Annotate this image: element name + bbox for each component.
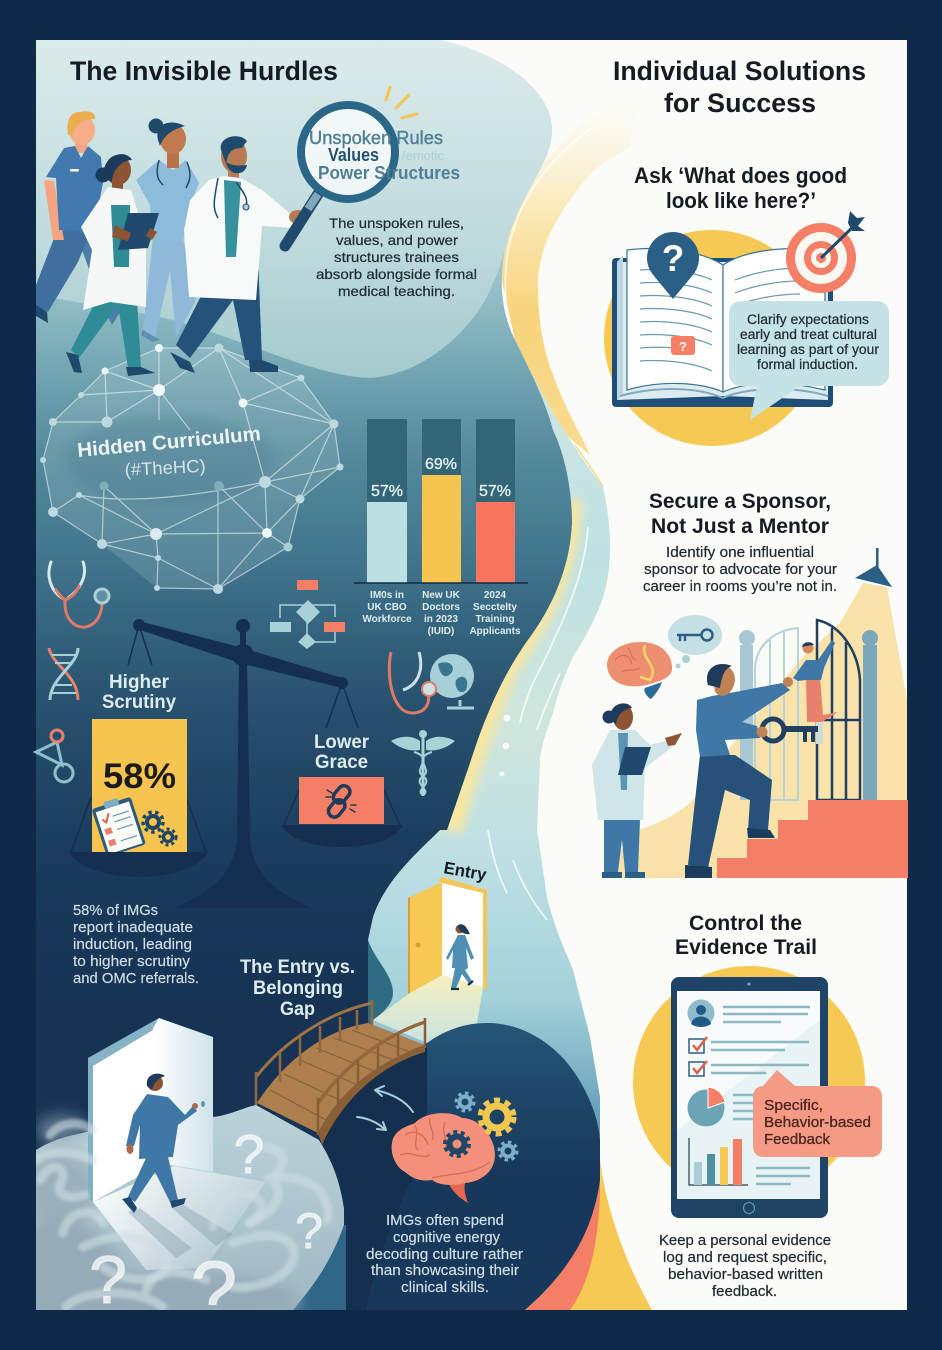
text: cognitive energy: than showcasing their: [371, 1263, 519, 1279]
band sparkles: [500, 714, 510, 776]
text: cognitive energy: [366, 1213, 523, 1296]
bar labels: (IUID): [428, 626, 454, 637]
heading: secure a sponsor: [649, 489, 831, 538]
icon: lamp: [855, 548, 892, 587]
label: hidden curriculum: (#TheHC): [124, 456, 206, 480]
label: higher scrutiny: [102, 672, 176, 713]
bar: specialty applicants: [476, 419, 515, 583]
floor under entry door: [373, 975, 483, 1043]
entry door glow shade: [368, 940, 393, 1030]
person walking to door: [122, 1074, 205, 1213]
text: evidence advice: Keep a personal evidence: [659, 1233, 831, 1249]
checklist: [689, 1037, 707, 1076]
man with key: [685, 664, 793, 878]
bar chart: IMG share: [354, 419, 528, 637]
text: sponsor advice: [643, 545, 837, 595]
doctor: white coat with clipboard: [66, 154, 159, 376]
text: hidden curriculum definition: values, and power: [336, 232, 458, 248]
text: cognitive energy: decoding culture rather: [366, 1247, 523, 1263]
callout: behavior-based feedback: Specific,: [764, 1098, 823, 1114]
icon: gears: [143, 812, 176, 845]
illustration: network brain: [40, 344, 344, 594]
text: evidence advice: feedback.: [712, 1284, 777, 1300]
fog swirls with question marks: ?: [191, 1244, 237, 1338]
heading: individual solutions: Individual Solutions: [613, 56, 866, 86]
illustration: open book: [604, 211, 865, 446]
pale wave band: [340, 370, 610, 1200]
band yellow outer edge: [575, 445, 603, 487]
magnifier words: /emotic: [402, 148, 444, 163]
shadows of legs: [128, 1204, 232, 1258]
label: hidden curriculum: Hidden Curriculum: [76, 423, 262, 462]
icon: flowchart: [270, 580, 345, 649]
icon: target with arrow: [786, 211, 865, 293]
heading: individual solutions: for Success: [664, 88, 816, 118]
label: higher scrutiny: Scrutiny: [102, 692, 176, 713]
text: cognitive energy: clinical skills.: [401, 1280, 489, 1296]
icon: small question tag: ?: [679, 339, 687, 354]
left pan with 58 percent card: [69, 719, 208, 877]
text: induction statistic: [73, 903, 199, 987]
heading: secure a sponsor: Not Just a Mentor: [651, 514, 830, 538]
icon: stethoscope and globe: [389, 652, 474, 713]
callout: behavior-based feedback: [753, 1070, 882, 1157]
panel: hurdles wave background: [36, 40, 572, 1310]
label: lower grace: Lower: [314, 732, 370, 753]
doctor: blue scrubs: [36, 111, 128, 325]
illustration: bridge: [256, 1000, 425, 1145]
floor under left door: [36, 1105, 344, 1310]
illustration: brain with gears: [357, 1086, 517, 1203]
doctor: light blue scrubs: [136, 118, 199, 342]
magnifier words: Power Structures: [318, 163, 460, 183]
label: hidden curriculum: [76, 423, 262, 480]
bar: new UK doctors: 69%: [425, 456, 457, 473]
label: lower grace: Grace: [315, 752, 368, 773]
magnifier words: [309, 128, 460, 183]
illustration: doctors walking: [36, 111, 307, 376]
doctor with clipboard: [592, 703, 682, 878]
text: evidence advice: log and request specific,: [663, 1250, 827, 1266]
text: sponsor advice: career in rooms you’re not in.: [643, 579, 837, 595]
heading: ask what does good look like: [634, 163, 847, 213]
bar: specialty applicants: 57%: [479, 483, 511, 500]
fog swirls with question marks: ?: [295, 1203, 323, 1259]
bar labels: Doctors: [422, 602, 460, 613]
text: sponsor advice: sponsor to advocate for your: [644, 562, 837, 578]
text: hidden curriculum definition: medical teaching.: [338, 283, 455, 299]
heading: secure a sponsor: Secure a Sponsor,: [649, 489, 831, 513]
bar labels: Workforce: [362, 614, 412, 625]
bar labels: in 2023: [424, 614, 458, 625]
title: the invisible hurdles: The Invisible Hurdles: [70, 56, 338, 86]
icon: stethoscope: [49, 562, 109, 627]
callout: clarify expectations: Clarify expectations: [747, 312, 869, 327]
profile avatar: [688, 1000, 714, 1027]
text: induction statistic: induction, leading: [73, 937, 192, 953]
bar labels: New UK: [422, 590, 461, 601]
left pan with 58 percent card: 58%: [103, 757, 176, 796]
arrows: [357, 1086, 413, 1130]
icon: question pin: [647, 232, 699, 299]
small person climbing: [793, 640, 838, 722]
dark column under bridge: [319, 1043, 427, 1310]
fog swirls with question marks: [36, 1123, 328, 1338]
heading: control the evidence trail: [675, 912, 817, 959]
yellow swoosh: [570, 1160, 652, 1310]
text: evidence advice: behavior-based written: [668, 1267, 823, 1283]
text: induction statistic: to higher scrutiny: [73, 954, 191, 970]
icon: dna helix: [49, 648, 78, 700]
mid-blue shading strip: [293, 1225, 366, 1310]
icon: brain with thought bubble key: [607, 615, 722, 699]
callout: clarify expectations: learning as part of your: [737, 342, 880, 357]
heading: entry vs belonging gap: Belonging: [253, 977, 343, 999]
band edge glow: [450, 500, 570, 830]
heading: entry vs belonging gap: Gap: [280, 998, 315, 1020]
bar labels: [362, 590, 521, 637]
callout: clarify expectations: early and treat cultural: [740, 327, 877, 342]
icon: small question tag: [671, 336, 695, 355]
right pan with broken chain: [281, 777, 403, 847]
fog swirls with question marks: ?: [89, 1242, 127, 1318]
illustration: entry door: [408, 877, 487, 994]
heading: control the evidence trail: Evidence Trail: [675, 936, 817, 959]
callout: clarify expectations: [729, 301, 889, 420]
bar: new UK doctors: [422, 419, 461, 583]
bar labels: IM0s in: [370, 590, 404, 601]
bar: IMGs in UK CBD workforce: [367, 419, 407, 583]
bar labels: Secctelty: [473, 602, 517, 613]
illustration: tablet with evidence log: [633, 966, 865, 1218]
icon: molecule: [36, 730, 73, 782]
pie chart: [688, 1087, 725, 1126]
text: hidden curriculum definition: [316, 215, 477, 299]
gates: [739, 620, 878, 800]
gears: [445, 1093, 517, 1160]
callout: behavior-based feedback: Feedback: [764, 1132, 831, 1148]
yellow swirl band: [495, 95, 640, 455]
label: lower grace: [314, 732, 370, 773]
label: entry: Entry: [442, 858, 488, 884]
bar labels: Training: [476, 614, 514, 625]
icon: caduceus: [391, 730, 455, 796]
text: induction statistic: 58% of IMGs: [73, 903, 158, 919]
person entering: [446, 924, 474, 988]
text: evidence advice: [659, 1233, 831, 1300]
text: sponsor advice: Identify one influential: [666, 545, 814, 561]
callout: behavior-based feedback: Behavior-based: [764, 1115, 871, 1131]
magnifier words: Values: [328, 145, 379, 165]
text: cognitive energy: IMGs often spend: [386, 1213, 504, 1229]
bar labels: 2024: [484, 590, 507, 601]
fog swirls with question marks: ?: [234, 1123, 264, 1185]
scale stand and beam: [128, 619, 358, 908]
small bar chart: [689, 1138, 748, 1185]
key: [762, 719, 818, 742]
illustration: sponsor at gate: [592, 548, 908, 878]
text: hidden curriculum definition: structures trainees: [334, 249, 459, 265]
text: hidden curriculum definition: The unspoken rules,: [329, 215, 464, 231]
bar: IMGs in UK CBD workforce: 57%: [371, 483, 403, 500]
text: hidden curriculum definition: absorb alongside formal: [316, 266, 477, 282]
heading: ask what does good look like: Ask ‘What does good: [634, 163, 847, 188]
label: higher scrutiny: Higher: [109, 672, 170, 693]
illustration: balance scale: [69, 619, 403, 908]
heading: entry vs belonging gap: The Entry vs.: [240, 956, 355, 978]
doctor: white coat with beard: [170, 136, 307, 373]
magnifier words: Unspoken Rules: [309, 128, 443, 148]
icon: magnifying glass: [285, 87, 417, 246]
fog behind door: [36, 1106, 307, 1310]
bar labels: UK CBO: [367, 602, 407, 613]
stairs: [717, 800, 908, 878]
text: cognitive energy: cognitive energy: [393, 1230, 501, 1246]
light upper blob: [36, 40, 552, 378]
heading: ask what does good look like: look like here?’: [666, 188, 816, 213]
coral swoosh: [525, 1180, 600, 1310]
bar labels: Applicants: [469, 626, 521, 637]
text: induction statistic: report inadequate: [73, 920, 193, 936]
heading: entry vs belonging gap: [240, 956, 355, 1020]
icon: broken chain: [326, 783, 356, 820]
callout: clarify expectations: formal induction.: [757, 357, 858, 372]
icon: question pin: ?: [662, 238, 684, 279]
illustration: left door and person: [88, 1018, 266, 1270]
heading: control the evidence trail: Control the: [689, 912, 802, 935]
text: induction statistic: and OMC referrals.: [73, 971, 199, 987]
heading: individual solutions: [613, 56, 866, 118]
band highlight streaks: [488, 127, 593, 920]
icon: clipboard: [91, 794, 146, 857]
dark lower blob: [319, 1023, 600, 1310]
